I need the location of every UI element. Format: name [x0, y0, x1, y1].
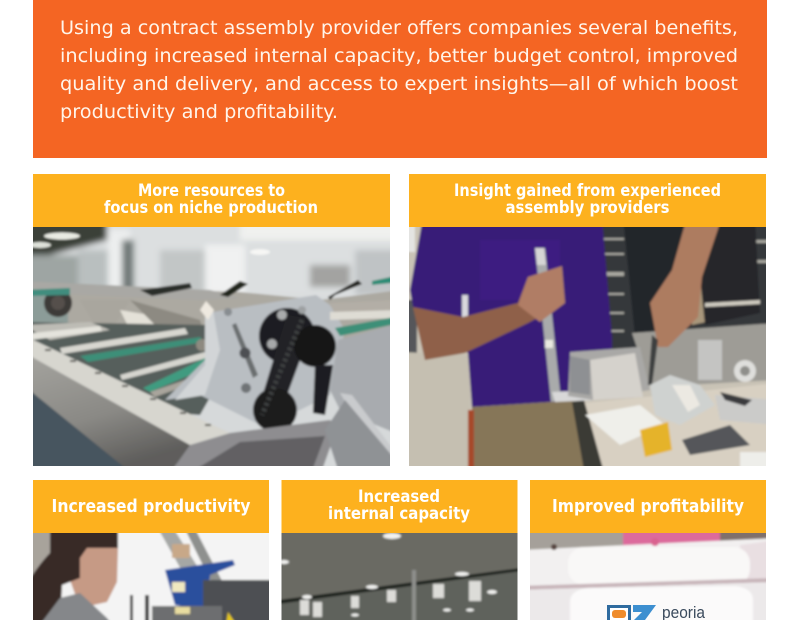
photo: worker at machine: [33, 533, 269, 620]
shirt: [410, 217, 612, 407]
heading: increased productivity: [33, 480, 269, 533]
photo: conveyor machine: [33, 227, 390, 466]
heading: more resources: More resources to: [138, 181, 285, 200]
panel: increased productivity: [23, 480, 279, 620]
intro text: including increased internal capacity, better budget control, improved: [60, 45, 738, 67]
parts on table: [650, 375, 715, 425]
panel: insight gained: [399, 174, 776, 476]
heading: insight gained: assembly providers: [506, 198, 670, 217]
torque wrench: [535, 248, 561, 402]
intro text: productivity and profitability.: [60, 101, 338, 123]
pants: [471, 400, 585, 466]
heading: more resources: [33, 174, 390, 227]
cylinders: [624, 227, 684, 332]
intro text: [60, 17, 738, 123]
heading: improved profitability: Improved profitability: [552, 497, 745, 517]
intro text: Using a contract assembly provider offers companies several benefits,: [60, 17, 738, 39]
foreground rail: [23, 352, 230, 476]
conveyor interior: [23, 322, 220, 415]
panel: increased internal capacity: [271, 480, 528, 620]
logo: [607, 605, 705, 620]
left arm: [412, 289, 536, 361]
photo: technician assembling part: [409, 227, 766, 466]
plate: [165, 295, 345, 425]
photo: branded box: [530, 533, 766, 620]
worker shirt: [42, 592, 110, 620]
heading: insight gained: Insight gained from experienced: [454, 181, 721, 200]
manifold: [632, 323, 776, 387]
intro panel: [33, 0, 767, 158]
shelves: [600, 227, 766, 350]
right arm and hand: [650, 217, 722, 347]
intro text: quality and delivery, and access to expert insights—all of which boost: [60, 73, 738, 95]
heading: increased capacity: [282, 480, 518, 533]
table: [585, 384, 766, 466]
heading: increased productivity: Increased productivity: [52, 497, 251, 517]
heading: increased capacity: internal capacity: [328, 504, 470, 523]
heading: more resources: focus on niche production: [104, 198, 318, 217]
worker face: [70, 548, 118, 608]
floor: [409, 350, 418, 361]
worker hair: [33, 533, 120, 620]
aluminum block: [568, 347, 650, 400]
panel: more resources: [23, 174, 400, 476]
heading: increased capacity: Increased: [358, 487, 440, 506]
pulleys and belt: [259, 308, 315, 364]
heading: insight gained: [409, 174, 766, 227]
far machinery: [66, 290, 390, 340]
photo: warehouse ceiling: [282, 533, 518, 620]
panel: improved profitability: [520, 480, 776, 620]
heading: improved profitability: [530, 480, 766, 533]
